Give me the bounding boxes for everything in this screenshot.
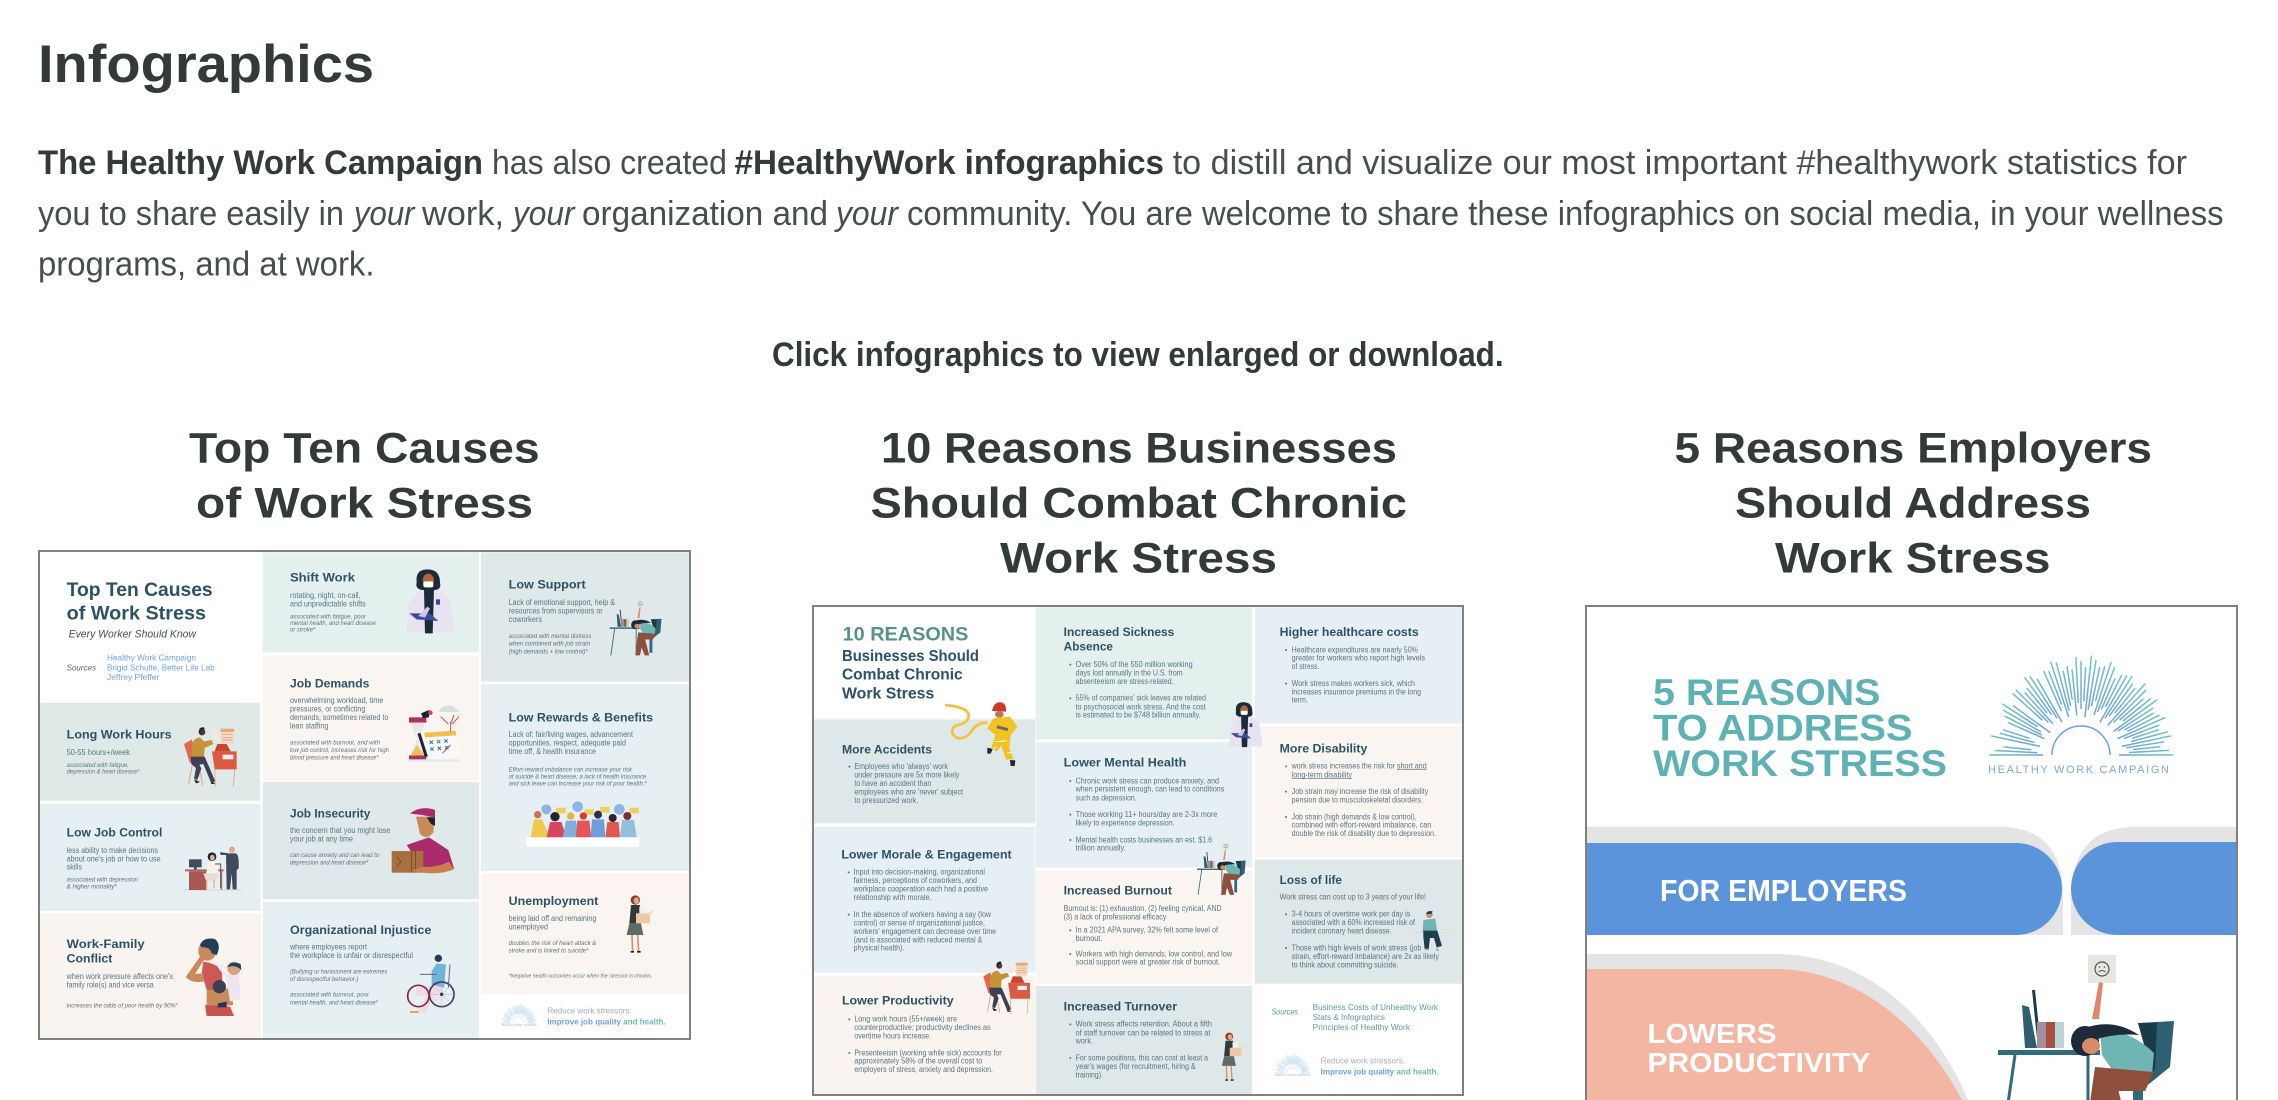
footer: logo and tagline bbox=[501, 1004, 666, 1027]
column heading: 5 Reasons bbox=[1674, 424, 2152, 582]
panel: Unemployment: *Negative health outcomes occur when the stressor is chronic. bbox=[509, 974, 653, 980]
panel: Long Work Hours: 50-55 hours+/week bbox=[67, 748, 130, 757]
section: lowers productivity bbox=[1587, 954, 1968, 1100]
panel: Lower Productivity: Long work hours (55+/week) are bbox=[854, 1015, 957, 1024]
panel: Shift Work: or stroke* bbox=[290, 627, 316, 634]
panel: Loss of life bbox=[1255, 859, 1462, 984]
panel: Lower Morale & Engagement: control) or sense of organizational justice, bbox=[854, 918, 985, 927]
column heading: 10 Reasons: Work Stress bbox=[1000, 534, 1277, 582]
infographic: 5 Reasons to Address Work Stress bbox=[1586, 606, 2237, 1100]
panel: Lower Mental Health: Lower Mental Health bbox=[1064, 756, 1186, 770]
panel: Job Insecurity: the concern that you might lose bbox=[290, 826, 391, 835]
logo: Healthy Work Campaign bbox=[1988, 656, 2173, 776]
panel: Lower Productivity: counterproductive; productivity declines as bbox=[854, 1023, 991, 1032]
panel: More Disability: long-term disability bbox=[1292, 770, 1352, 779]
panel: Unemployment: being laid off and remaining bbox=[509, 914, 596, 923]
panel: More Disability: Job strain (high demands & low control), bbox=[1292, 812, 1417, 821]
infographic title block bbox=[842, 625, 979, 703]
panel: Low Job Control: skills bbox=[67, 863, 82, 872]
panel: Unemployment: stroke and is linked to suicide* bbox=[509, 948, 589, 955]
column heading: 5 Reasons: 5 Reasons Employers bbox=[1674, 424, 2152, 472]
infographic title block: of Work Stress bbox=[67, 603, 206, 624]
infographic title block: Work Stress bbox=[842, 686, 935, 703]
panel: More Disability: combined with effort-reward imbalance, can bbox=[1292, 821, 1431, 830]
panel: Job Demands: overwhelming workload, time bbox=[290, 696, 384, 705]
panel: Increased Turnover: Increased Turnover bbox=[1064, 999, 1177, 1013]
panel: Increased Burnout: Burnout is: (1) exhaustion, (2) feeling cynical, AND bbox=[1064, 904, 1222, 913]
panel: Low Support: (high demands + low control)* bbox=[509, 648, 588, 655]
intro paragraph: your bbox=[511, 195, 576, 233]
icon: firefighter with hose bbox=[945, 702, 1017, 766]
panel: Low Support: associated with mental distress bbox=[509, 633, 592, 640]
panel: Long Work Hours: associated with fatigue, bbox=[67, 762, 129, 769]
panel: Higher healthcare costs: increases insurance premiums in the long bbox=[1292, 687, 1421, 696]
intro paragraph: your bbox=[352, 195, 416, 233]
panel: Loss of life: Loss of life bbox=[1280, 873, 1342, 887]
panel: Shift Work: mental health, and heart disease bbox=[290, 620, 376, 627]
panel: Lower Productivity bbox=[814, 976, 1035, 1094]
icon: calendar and hourglass bbox=[409, 706, 460, 761]
panel: Lower Mental Health: Those working 11+ hours/day are 2-3x more bbox=[1076, 810, 1218, 819]
panel: Shift Work: and unpredictable shifts bbox=[290, 599, 366, 608]
section: lowers productivity: LOWERS bbox=[1648, 1018, 1776, 1049]
panel: Low Rewards & Benefits: of suicide & heart disease; a lack of health insurance bbox=[509, 773, 647, 780]
panel: Loss of life: to think about committing suicide. bbox=[1292, 960, 1399, 969]
instruction line: Click infographics to view enlarged or download. bbox=[772, 336, 1504, 374]
panel: Low Job Control: & higher mortality* bbox=[67, 883, 117, 890]
panel: Low Rewards & Benefits: Lack of: fair/living wages, advancement bbox=[509, 730, 634, 739]
column heading: 10 Reasons bbox=[870, 424, 1407, 582]
intro paragraph: The Healthy Work Campaign bbox=[38, 144, 483, 182]
panel: More Accidents: under pressure are 5x more likely bbox=[854, 771, 959, 780]
panel: Organizational Injustice: (Bullying or harassment are extremes bbox=[290, 968, 388, 975]
intro paragraph bbox=[38, 144, 2224, 284]
intro paragraph: your bbox=[834, 195, 900, 233]
intro paragraph: programs, and at work. bbox=[38, 246, 374, 284]
panel: Work-Family Conflict: Conflict bbox=[67, 951, 112, 965]
panel: Higher healthcare costs: term. bbox=[1292, 696, 1308, 705]
infographic title: TO ADDRESS bbox=[1653, 708, 1912, 748]
panel: Increased Sickness Absence: 55% of companies' sick leaves are related bbox=[1076, 694, 1206, 703]
panel: Higher healthcare costs: Higher healthcare costs bbox=[1280, 625, 1419, 639]
panel: Low Support: coworkers bbox=[509, 615, 542, 624]
panel: Job Insecurity: depression and heart disease* bbox=[290, 860, 369, 867]
panel: Long Work Hours: Long Work Hours bbox=[67, 727, 172, 741]
panel: Low Rewards & Benefits: Low Rewards & Benefits bbox=[509, 710, 653, 724]
page heading: Infographics: Infographics bbox=[38, 35, 374, 94]
panel: Job Demands: low job control, increases risk for high bbox=[290, 747, 389, 754]
panel: More Accidents bbox=[814, 719, 1035, 823]
panel: Loss of life: 3-4 hours of overtime work per day is bbox=[1292, 910, 1410, 919]
panel: Low Support bbox=[481, 552, 689, 682]
sources block bbox=[1271, 1003, 1438, 1032]
panel: More Disability: Job strain may increase the risk of disability bbox=[1292, 787, 1428, 796]
panel: Higher healthcare costs bbox=[1255, 607, 1462, 724]
panel: Lower Morale & Engagement: Input into decision-making, organizational bbox=[854, 868, 985, 877]
sources block: Sources bbox=[1271, 1008, 1298, 1017]
panel: Shift Work: rotating, night, on-call, bbox=[290, 591, 361, 600]
panel: Job Demands: lean staffing bbox=[290, 721, 328, 730]
panel: Loss of life: associated with a 60% increased risk of bbox=[1292, 918, 1416, 927]
panel: Low Job Control bbox=[40, 804, 261, 911]
intro paragraph: organization and bbox=[582, 195, 828, 233]
panel: Increased Sickness Absence: is estimated to be $748 billion annually. bbox=[1076, 711, 1201, 720]
panel: Organizational Injustice: the workplace is unfair or disrespectful bbox=[290, 951, 413, 960]
panel: Job Demands: pressures, or conflicting bbox=[290, 704, 365, 713]
panel: Higher healthcare costs: Work stress makes workers sick, which bbox=[1292, 679, 1415, 688]
panel: Organizational Injustice bbox=[263, 902, 479, 1038]
intro paragraph: work, bbox=[421, 195, 504, 233]
panel: Job Demands: demands, sometimes related to bbox=[290, 713, 389, 722]
column heading: 5 Reasons: Work Stress bbox=[1775, 534, 2050, 582]
infographic title: WORK STRESS bbox=[1653, 743, 1947, 784]
icon: slumped worker at desk bbox=[1998, 955, 2174, 1100]
panel: Lower Mental Health: such as depression. bbox=[1076, 793, 1137, 802]
infographic: Top Ten Causes of Work Stress bbox=[39, 551, 690, 1039]
icon: seated man bbox=[1413, 911, 1452, 951]
infographic title block: Brigid Schulte, Better Life Lab bbox=[107, 663, 215, 672]
intro paragraph: to distill and visualize our most important #healthywork statistics for bbox=[1173, 144, 2187, 182]
panel: Unemployment: doubles the risk of heart attack & bbox=[509, 940, 597, 947]
panel: Lower Morale & Engagement: workplace cooperation each had a positive bbox=[853, 885, 988, 894]
banner: second pill bbox=[2071, 827, 2236, 935]
infographic title bbox=[1653, 672, 1947, 784]
footer: logo and tagline: Improve job quality and health. bbox=[547, 1018, 666, 1027]
panel: More Disability bbox=[1255, 726, 1462, 857]
panel: Job Demands: blood pressure and heart disease* bbox=[290, 755, 379, 762]
panel: Increased Burnout: social support were at greater risk of burnout. bbox=[1076, 958, 1220, 967]
panel: Shift Work bbox=[263, 552, 479, 652]
panel: Organizational Injustice: where employees report bbox=[289, 943, 368, 952]
panel: More Accidents: employees who are 'never' subject bbox=[854, 788, 964, 797]
panel: Increased Burnout: In a 2021 APA survey, 32% felt some level of bbox=[1076, 926, 1219, 935]
infographic title block: Every Worker Should Know bbox=[69, 629, 197, 641]
column heading: 10 Reasons: Should Combat Chronic bbox=[870, 480, 1407, 528]
panel: Low Job Control: less ability to make decisions bbox=[67, 846, 158, 855]
panel: Increased Burnout: Workers with high demands, low control, and low bbox=[1076, 949, 1232, 958]
panel: Low Support: resources from supervisors or bbox=[509, 607, 603, 616]
panel: Increased Turnover: work. bbox=[1075, 1037, 1093, 1046]
column heading: Top Ten Causes bbox=[189, 424, 540, 528]
panel: Work-Family Conflict: increases the odds of poor health by 90%* bbox=[67, 1002, 178, 1009]
panel: Low Job Control: associated with depression bbox=[67, 877, 138, 884]
panel: Loss of life: strain, effort-reward imbalance) are 2x as likely bbox=[1292, 952, 1439, 961]
panel: Higher healthcare costs: of stress. bbox=[1292, 662, 1319, 671]
panel: Increased Sickness Absence: Increased Sickness bbox=[1064, 625, 1175, 639]
panel: Lower Morale & Engagement: workers' engagement can decrease over time bbox=[853, 927, 996, 936]
infographic title block: Businesses Should bbox=[842, 648, 979, 665]
panel: Work-Family Conflict: Work-Family bbox=[67, 937, 145, 951]
panel: Increased Burnout: (3) a lack of professional efficacy bbox=[1064, 912, 1166, 921]
panel: Increased Sickness Absence: to psychosocial work stress. And the cost bbox=[1076, 702, 1206, 711]
panel: Increased Burnout: Increased Burnout bbox=[1064, 883, 1172, 897]
panel: More Disability: pension due to musculoskeletal disorders. bbox=[1292, 795, 1423, 804]
column heading: Top Ten Causes: Top Ten Causes bbox=[189, 424, 540, 472]
panel: Increased Sickness Absence: absenteeism are stress-related. bbox=[1076, 677, 1174, 686]
panel: Job Insecurity: can cause anxiety and can lead to bbox=[290, 852, 379, 859]
panel: Lower Mental Health: Mental health costs businesses an est. $1.6 bbox=[1076, 835, 1212, 844]
panel: Increased Sickness Absence: Over 50% of the 550 million working bbox=[1076, 660, 1193, 669]
panel: Low Support: when combined with job strain bbox=[509, 641, 590, 648]
icon: doctor bbox=[1229, 702, 1263, 747]
panel: Long Work Hours bbox=[40, 703, 260, 801]
panel: Organizational Injustice: of disrespectful behavior.) bbox=[290, 976, 358, 983]
panel: Increased Turnover: year's wages (for recruitment, hiring & bbox=[1076, 1062, 1196, 1071]
panel: Work-Family Conflict: family role(s) and vice versa bbox=[67, 980, 154, 989]
panel: Unemployment bbox=[481, 873, 689, 994]
infographic title block: Sources bbox=[67, 664, 96, 673]
panel: Increased Turnover: For some positions, this can cost at least a bbox=[1076, 1053, 1208, 1062]
panel: Lower Mental Health: when persistent enough, can lead to conditions bbox=[1075, 785, 1224, 794]
column heading: Top Ten Causes: of Work Stress bbox=[196, 480, 533, 528]
panel: Lower Morale & Engagement: relationship with morale. bbox=[854, 893, 932, 902]
intro paragraph: #HealthyWork infographics bbox=[734, 144, 1164, 182]
panel: Increased Turnover: training). bbox=[1076, 1070, 1103, 1079]
footer: logo and tagline: Reduce work stressors. bbox=[547, 1007, 632, 1016]
panel: More Accidents: More Accidents bbox=[842, 743, 932, 757]
panel: More Accidents: to have an accident than bbox=[854, 779, 931, 788]
panel: Low Rewards & Benefits: opportunities, respect, adequate paid bbox=[509, 739, 626, 748]
infographic: 10 Reasons Businesses Should Combat Chronic Work Stress bbox=[813, 606, 1463, 1095]
panel: Low Rewards & Benefits: and sick leave can increase your risk of poor health.* bbox=[509, 780, 647, 787]
icon: parent with baby bbox=[186, 938, 241, 1016]
panel: Lower Morale & Engagement: physical health). bbox=[854, 944, 904, 953]
panel: Lower Mental Health: trillion annually. bbox=[1076, 844, 1126, 853]
sources block: Stats & Infographics bbox=[1313, 1013, 1385, 1022]
panel: Unemployment: Unemployment bbox=[509, 894, 598, 908]
panel: Long Work Hours: depression & heart disease* bbox=[67, 769, 140, 776]
panel: Lower Morale & Engagement: (and is associated with reduced mental & bbox=[854, 935, 983, 944]
panel: Lower Morale & Engagement: In the absence of workers having a say (low bbox=[854, 910, 991, 919]
panel: Work-Family Conflict: when work pressure affects one's bbox=[66, 972, 173, 981]
infographic title block: Jeffrey Pfeffer bbox=[107, 673, 160, 682]
footer: logo and tagline: Improve job quality and health. bbox=[1321, 1068, 1439, 1077]
panel: Lower Productivity: employers of stress, anxiety and depression. bbox=[854, 1065, 993, 1074]
intro paragraph: has also created bbox=[492, 144, 727, 182]
panel: Increased Sickness Absence: days lost annually in the U.S. from bbox=[1076, 668, 1183, 677]
panel: Increased Burnout: burnout. bbox=[1076, 934, 1102, 943]
icon: crowd of workers bbox=[526, 801, 639, 847]
panel: Job Insecurity: your job at any time bbox=[290, 834, 353, 843]
banner: for employers: FOR EMPLOYERS bbox=[1660, 873, 1907, 908]
panel: Increased Burnout bbox=[1036, 870, 1252, 984]
infographic title block: 10 REASONS bbox=[843, 625, 968, 646]
column heading: 5 Reasons: Should Address bbox=[1735, 480, 2091, 528]
panel: Organizational Injustice: associated with burnout, poor bbox=[290, 992, 370, 999]
infographic title block: Healthy Work Campaign bbox=[107, 653, 196, 662]
panel: Increased Sickness Absence: Absence bbox=[1064, 639, 1113, 653]
panel: Lower Productivity: Presenteeism (working while sick) accounts for bbox=[854, 1048, 1002, 1057]
panel: Lower Morale & Engagement: fairness, perceptions of coworkers, and bbox=[854, 876, 977, 885]
panel: Loss of life: incident coronary heart disease. bbox=[1292, 927, 1392, 936]
panel: Lower Productivity: approximately 58% of the overall cost to bbox=[854, 1057, 983, 1066]
footer: logo and tagline bbox=[1274, 1054, 1439, 1077]
panel: Low Support: Lack of emotional support, help & bbox=[509, 598, 616, 607]
panel: Increased Sickness Absence bbox=[1036, 607, 1252, 739]
panel: Shift Work: Shift Work bbox=[290, 570, 355, 584]
panel: Unemployment: unemployed bbox=[509, 922, 548, 931]
panel: More Disability: More Disability bbox=[1280, 742, 1368, 756]
icon: office meeting bbox=[184, 847, 242, 890]
panel: Lower Mental Health bbox=[1036, 742, 1252, 868]
panel: Job Insecurity: Job Insecurity bbox=[290, 806, 371, 820]
column heading: 10 Reasons: 10 Reasons Businesses bbox=[881, 424, 1397, 472]
footer: logo and tagline: Reduce work stressors. bbox=[1321, 1057, 1405, 1066]
panel: Lower Mental Health: Chronic work stress can produce anxiety, and bbox=[1076, 776, 1219, 785]
panel: Job Demands: Job Demands bbox=[290, 676, 370, 690]
panel: Low Rewards & Benefits: Effort-reward imbalance can increase your risk bbox=[509, 767, 633, 774]
panel: Higher healthcare costs: Healthcare expenditures are nearly 50% bbox=[1292, 645, 1418, 654]
infographic title block: Top Ten Causes bbox=[67, 580, 213, 601]
footer: logo and tagline: HEALTHY WORK CAMPAIGN bbox=[502, 1023, 537, 1027]
intro paragraph: you to share easily in bbox=[38, 195, 344, 233]
infographic title block: Combat Chronic bbox=[842, 667, 963, 684]
sources block: Principles of Healthy Work bbox=[1313, 1023, 1410, 1032]
panel: Higher healthcare costs: greater for workers who report high levels bbox=[1292, 654, 1425, 663]
infographic title block bbox=[67, 580, 215, 682]
panel: Low Job Control: Low Job Control bbox=[67, 825, 162, 839]
panel: More Disability: double the risk of disability due to depression. bbox=[1292, 829, 1436, 838]
panel: Job Demands bbox=[263, 656, 479, 781]
section: lowers productivity: PRODUCTIVITY bbox=[1648, 1047, 1871, 1078]
panel: Job Insecurity bbox=[263, 782, 479, 899]
icon: man at desk bbox=[983, 962, 1030, 1014]
panel: Work-Family Conflict bbox=[40, 913, 261, 1038]
sources block: Business Costs of Unhealthy Work bbox=[1313, 1003, 1438, 1012]
panel: Loss of life: Those with high levels of work stress (job bbox=[1292, 943, 1422, 952]
icon: person in wheelchair bbox=[408, 955, 454, 1013]
icon: worker with box bbox=[392, 808, 454, 873]
panel: More Accidents: Employees who 'always' work bbox=[854, 762, 948, 771]
icon: slumped worker at desk bbox=[1197, 842, 1246, 895]
infographic title: 5 REASONS bbox=[1653, 672, 1880, 713]
panel: Increased Turnover: of staff turnover can be related to stress at bbox=[1076, 1028, 1211, 1037]
footer: logo and tagline: HEALTHY WORK CAMPAIGN bbox=[1275, 1073, 1310, 1077]
panel: Low Rewards & Benefits bbox=[481, 684, 689, 871]
panel: Lower Morale & Engagement bbox=[814, 827, 1035, 973]
panel: Low Rewards & Benefits: time off, & health insurance bbox=[509, 747, 597, 756]
panel: Lower Mental Health: likely to experience depression. bbox=[1076, 819, 1175, 828]
panel: More Disability: work stress increases the risk for short and bbox=[1291, 762, 1427, 771]
intro paragraph: community. You are welcome to share these infographics on social media, in your wellness bbox=[907, 195, 2224, 233]
panel: Shift Work: associated with fatigue, poor bbox=[290, 613, 367, 620]
banner: for employers bbox=[1587, 827, 2063, 935]
panel: Loss of life: Work stress can cost up to 3 years of your life! bbox=[1280, 893, 1426, 902]
panel: More Accidents: to pressurized work. bbox=[854, 796, 918, 805]
panel: Low Support: Low Support bbox=[509, 578, 586, 592]
logo: Healthy Work Campaign: HEALTHY WORK CAMPAIGN bbox=[1988, 764, 2169, 776]
panel: Lower Productivity: overtime hours increase. bbox=[854, 1031, 931, 1040]
panel: Organizational Injustice: mental health, and heart disease* bbox=[290, 999, 378, 1006]
panel: Job Demands: associated with burnout, and with bbox=[290, 739, 380, 746]
panel: Organizational Injustice: Organizational Injustice bbox=[290, 923, 432, 937]
panel: Increased Turnover: Work stress affects retention. About a fifth bbox=[1076, 1020, 1212, 1029]
panel: Lower Productivity: Lower Productivity bbox=[842, 994, 954, 1008]
panel: Increased Turnover bbox=[1036, 986, 1252, 1094]
panel: Lower Morale & Engagement: Lower Morale & Engagement bbox=[841, 847, 1012, 861]
panel: Low Job Control: about one's job or how to use bbox=[67, 854, 161, 863]
